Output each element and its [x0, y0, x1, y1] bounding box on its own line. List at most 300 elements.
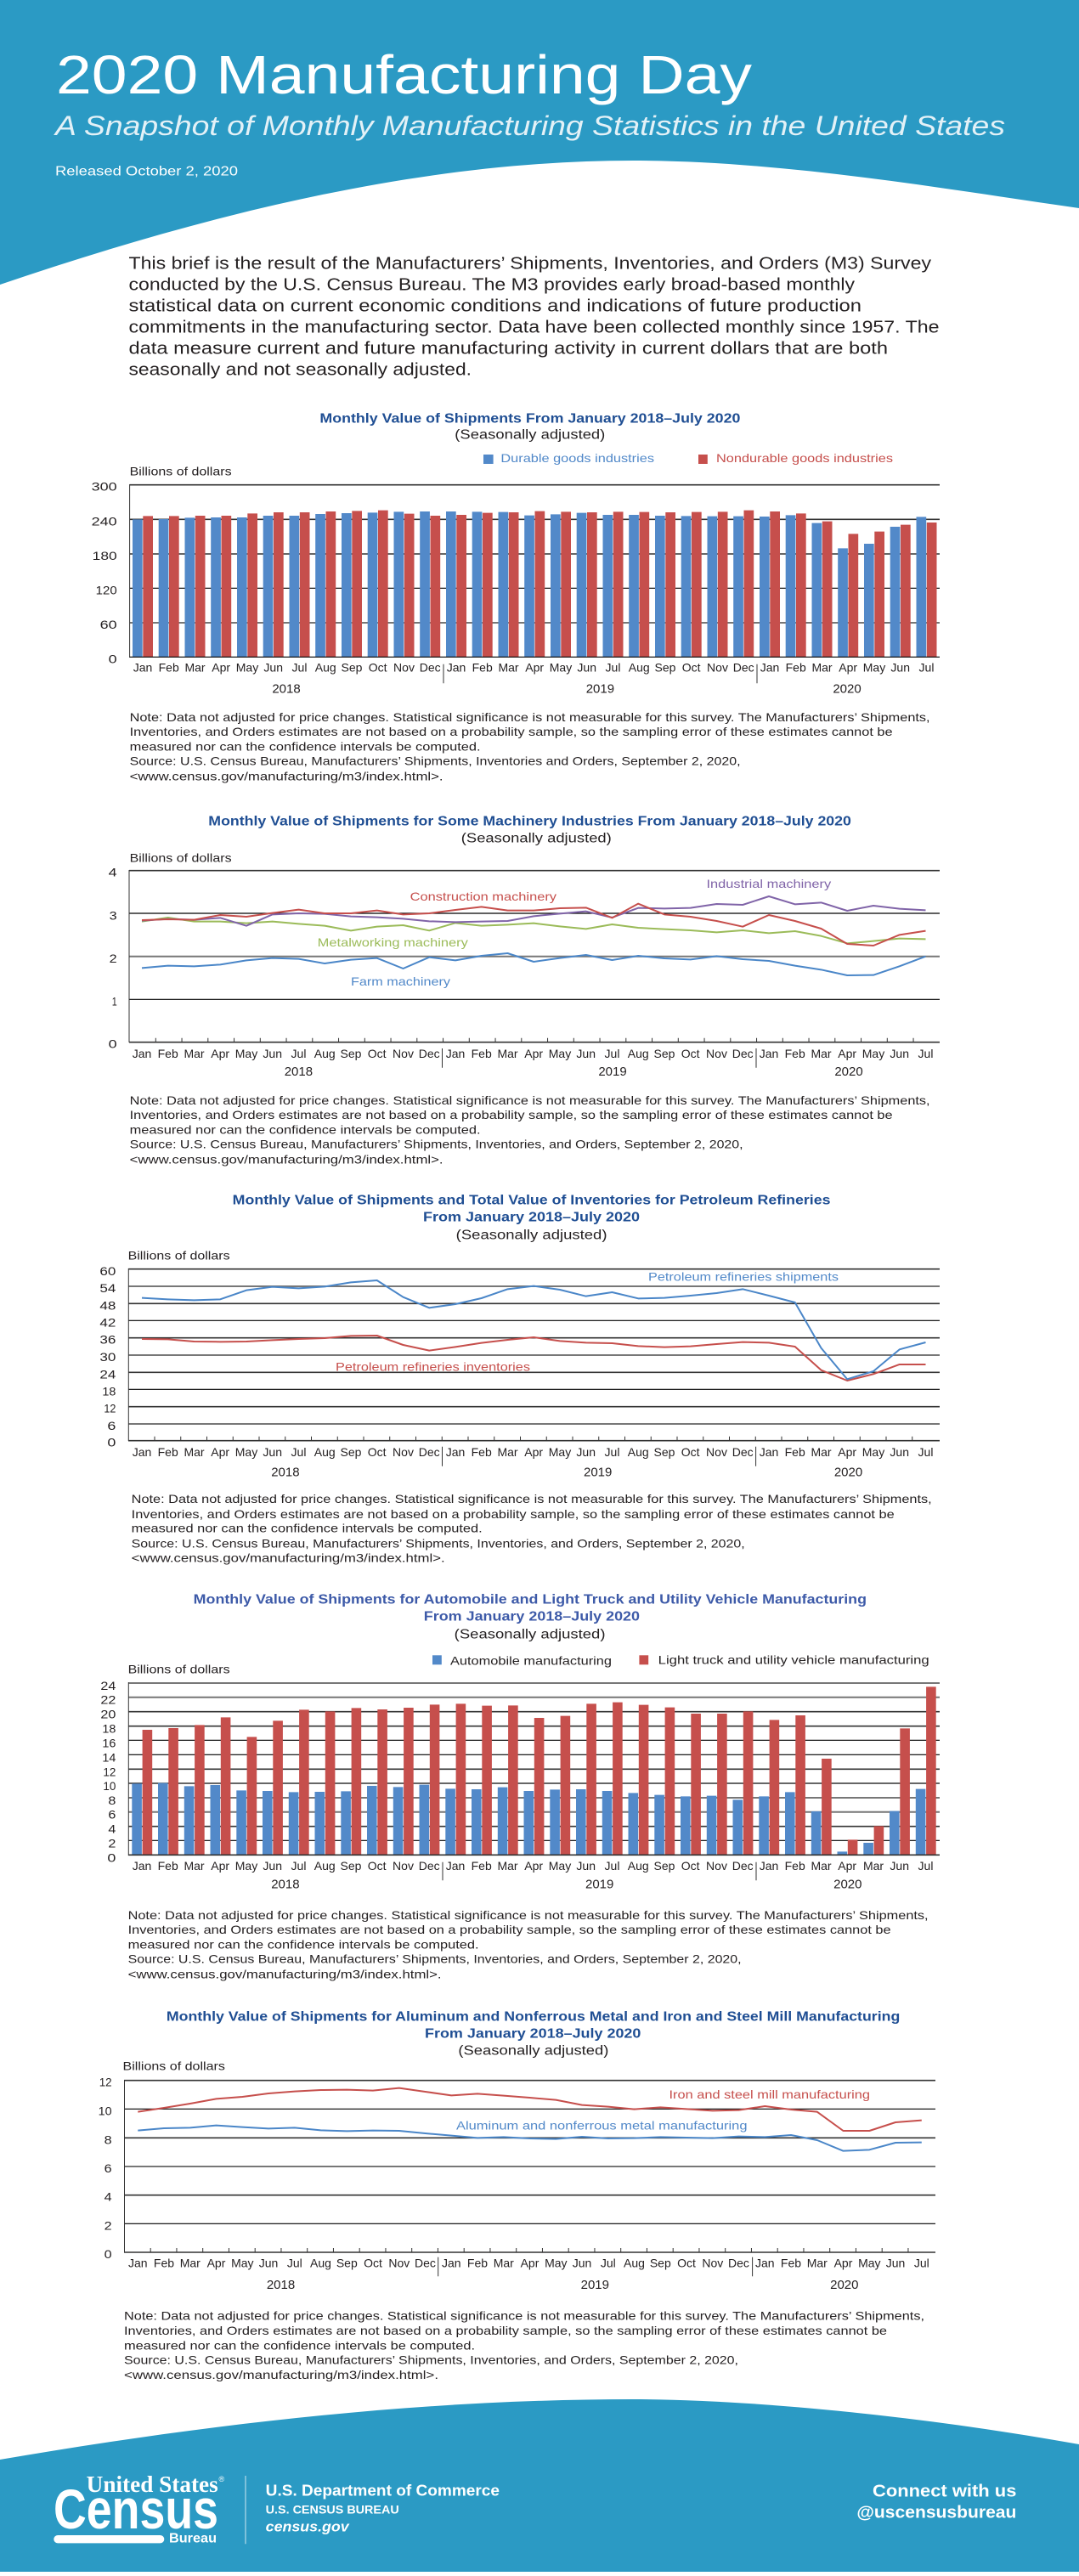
axis unit label: Billions of dollars — [128, 1249, 230, 1263]
month labels: Aug — [314, 1047, 336, 1060]
line: petroleum refineries inventories — [142, 1336, 926, 1381]
subtitle: A Snapshot of Monthly Manufacturing Statistics in the United States — [54, 110, 1005, 141]
month labels: Mar — [180, 2257, 201, 2270]
month labels: Feb — [472, 1047, 492, 1060]
header banner — [0, 0, 1079, 285]
y axis labels: 4 — [105, 2190, 112, 2204]
y axis labels — [99, 2076, 112, 2261]
month labels: Jan — [128, 2257, 148, 2270]
month labels: Apr — [211, 1859, 229, 1873]
census bureau logo: United States — [87, 2471, 218, 2497]
axis unit label: Billions of dollars — [130, 464, 232, 477]
month labels: May — [545, 2257, 568, 2270]
month labels: May — [863, 661, 885, 675]
month labels: Jun — [890, 1445, 909, 1459]
month labels: Feb — [781, 2257, 801, 2270]
chart title — [194, 1593, 867, 1624]
year labels: 2019 — [581, 2278, 609, 2292]
year labels: 2019 — [586, 682, 614, 697]
month labels: Aug — [628, 1445, 649, 1459]
year labels: 2018 — [285, 1065, 313, 1079]
month labels: Apr — [521, 2257, 540, 2270]
chart subtitle: (Seasonally adjusted) — [461, 832, 612, 846]
intro text block: data measure current and future manufacturing activity in current dollars that are both — [129, 340, 888, 359]
intro text block: conducted by the U.S. Census Bureau. The M3 provides early broad-based monthly — [129, 276, 855, 295]
y axis labels: 48 — [99, 1298, 116, 1312]
month labels: Nov — [706, 1445, 727, 1459]
month labels: Jul — [918, 1859, 933, 1873]
note and source: measured nor can the confidence intervals be computed. — [130, 1123, 481, 1137]
year labels: 2019 — [584, 1466, 612, 1480]
month labels: May — [235, 1445, 257, 1459]
month labels: Jun — [576, 1859, 596, 1873]
month labels: Jan — [760, 1047, 778, 1060]
month labels: Oct — [364, 2257, 382, 2270]
y axis labels: 16 — [102, 1737, 116, 1750]
chart title: From January 2018–July 2020 — [424, 1610, 640, 1624]
month labels: Sep — [341, 1445, 362, 1459]
social call to action: @uscensusbureau — [856, 2503, 1016, 2522]
chart title: Monthly Value of Shipments for Automobile and Light Truck and Utility Vehicle Manufacturing — [194, 1593, 867, 1607]
y axis labels: 6 — [105, 2161, 112, 2175]
month labels: Aug — [628, 1859, 649, 1873]
note and source: <www.census.gov/manufacturing/m3/index.html>. — [130, 770, 443, 783]
note and source: Inventories, and Orders estimates are not based on a probability sample, so the sampling error of these estimates cannot be — [128, 1923, 891, 1936]
y axis labels: 3 — [110, 909, 117, 923]
month labels: Apr — [838, 1859, 856, 1873]
y axis labels: 10 — [103, 1779, 116, 1793]
month labels: Nov — [706, 1047, 727, 1060]
department text — [266, 2483, 500, 2534]
month labels: Feb — [785, 1859, 805, 1873]
y axis labels — [99, 1264, 116, 1449]
month labels: Jan — [760, 661, 779, 675]
y axis labels: 240 — [92, 514, 117, 528]
note and source — [130, 710, 930, 783]
y axis labels: 4 — [108, 1822, 116, 1836]
y axis labels: 12 — [104, 1402, 116, 1415]
month labels: Aug — [628, 1047, 649, 1060]
month labels: Jun — [890, 1859, 909, 1873]
year labels: 2018 — [267, 2278, 295, 2292]
month labels: Apr — [834, 2257, 853, 2270]
month labels: May — [231, 2257, 254, 2270]
legend: Nondurable goods industries — [716, 451, 893, 465]
month labels: Jul — [291, 1859, 306, 1873]
month labels: Aug — [624, 2257, 645, 2270]
month labels: Feb — [472, 1445, 492, 1459]
axis unit label: Billions of dollars — [130, 850, 232, 864]
y axis labels — [92, 480, 117, 665]
month labels: Jan — [133, 1859, 151, 1873]
department text: U.S. CENSUS BUREAU — [266, 2503, 399, 2517]
y axis labels: 6 — [108, 1808, 116, 1822]
social call to action — [856, 2482, 1016, 2522]
year labels: 2020 — [833, 1878, 862, 1892]
title: 2020 Manufacturing Day — [56, 44, 752, 105]
month labels: Sep — [341, 1047, 362, 1060]
y axis labels: 0 — [107, 1850, 116, 1864]
month labels: Mar — [184, 1047, 205, 1060]
chart subtitle: (Seasonally adjusted) — [455, 1627, 605, 1641]
y axis labels — [109, 866, 117, 1050]
y axis labels: 0 — [109, 1037, 117, 1050]
line: industrial machinery — [142, 896, 926, 926]
month labels: Jun — [573, 2257, 591, 2270]
note and source: <www.census.gov/manufacturing/m3/index.html>. — [132, 1551, 445, 1565]
month labels: Jun — [263, 1445, 282, 1459]
month labels: Nov — [393, 661, 415, 675]
department text: census.gov — [266, 2518, 350, 2534]
month labels: Jun — [576, 1445, 596, 1459]
y axis labels: 60 — [100, 618, 117, 631]
month labels: Nov — [388, 2257, 410, 2270]
month labels: Jul — [292, 661, 307, 675]
month labels: Oct — [682, 661, 701, 675]
month labels: Dec — [415, 2257, 436, 2270]
note and source: Source: U.S. Census Bureau, Manufacturers’ Shipments, Inventories, and Orders, September 2, 2020, — [128, 1952, 742, 1966]
y axis labels: 2 — [108, 1836, 116, 1850]
month labels: Mar — [811, 1859, 832, 1873]
note and source: measured nor can the confidence intervals be computed. — [128, 1938, 479, 1952]
month labels: Jun — [263, 1047, 282, 1060]
month labels: Jul — [918, 1445, 933, 1459]
month labels: Jan — [755, 2257, 775, 2270]
line: iron and steel mill manufacturing — [138, 2088, 922, 2131]
axis unit label: Billions of dollars — [122, 2059, 225, 2073]
month labels: Jul — [605, 1859, 619, 1873]
line label: iron and steel: Iron and steel mill manufacturing — [669, 2087, 870, 2101]
line: farm machinery — [142, 953, 926, 975]
line label: metalworking machinery: Metalworking machinery — [318, 935, 468, 949]
intro text block: statistical data on current economic conditions and indications of future production — [129, 297, 862, 316]
year labels: 2020 — [830, 2278, 858, 2292]
month labels: Mar — [184, 1859, 205, 1873]
y axis labels: 300 — [92, 480, 117, 494]
month labels: Oct — [681, 1047, 700, 1060]
panel: petroleum refineries line chart — [99, 1194, 940, 1565]
note and source: measured nor can the confidence intervals be computed. — [124, 2338, 475, 2352]
month labels: Jul — [291, 1445, 306, 1459]
legend: Durable goods industries — [500, 451, 654, 465]
month labels: Jun — [890, 1047, 909, 1060]
month labels: Aug — [629, 661, 650, 675]
month labels: Sep — [342, 661, 363, 675]
month labels: Oct — [681, 1445, 700, 1459]
y axis labels: 2 — [110, 952, 117, 965]
panel: aluminum and steel line chart — [99, 2010, 935, 2381]
note and source: Note: Data not adjusted for price changes. Statistical significance is not measurable for this survey. The Manufacturers’ Shipments, — [132, 1492, 932, 1505]
line: construction machinery — [142, 904, 926, 946]
release date: Released October 2, 2020 — [55, 165, 238, 179]
month labels: Jul — [918, 1047, 933, 1060]
month labels: Mar — [863, 1859, 884, 1873]
chart title — [233, 1194, 831, 1225]
year labels: 2018 — [272, 682, 301, 697]
month labels: Mar — [184, 661, 206, 675]
y axis labels: 24 — [100, 1679, 116, 1692]
note and source — [132, 1492, 932, 1565]
chart title — [167, 2010, 900, 2042]
month labels: Jan — [760, 1445, 778, 1459]
y axis labels: 180 — [93, 549, 117, 562]
month labels: Jan — [446, 1047, 465, 1060]
note and source — [128, 1908, 929, 1981]
line label: industrial machinery: Industrial machinery — [707, 877, 831, 890]
month labels: Apr — [211, 1047, 229, 1060]
month labels: Feb — [158, 1445, 178, 1459]
month labels: Mar — [807, 2257, 828, 2270]
year labels: 2018 — [271, 1878, 300, 1892]
chart subtitle: (Seasonally adjusted) — [455, 428, 605, 443]
month labels: Jan — [760, 1859, 778, 1873]
month labels: Jul — [291, 1047, 306, 1060]
month labels: Nov — [393, 1445, 414, 1459]
year labels: 2020 — [833, 682, 862, 697]
month labels: Dec — [420, 661, 441, 675]
y axis labels: 120 — [96, 583, 117, 596]
line label: farm machinery: Farm machinery — [351, 974, 450, 988]
note and source: Source: U.S. Census Bureau, Manufacturers’ Shipments, Inventories, and Orders, September 2, 2020, — [130, 1138, 743, 1151]
bars: nondurable goods — [143, 511, 937, 657]
line: aluminum and nonferrous metal manufacturing — [138, 2126, 922, 2151]
month labels: Feb — [472, 661, 493, 675]
chart subtitle: (Seasonally adjusted) — [458, 2044, 608, 2059]
month labels: Sep — [336, 2257, 358, 2270]
month labels: Apr — [838, 1445, 856, 1459]
line: petroleum refineries shipments — [142, 1280, 926, 1379]
bars: durable goods — [133, 511, 926, 657]
y axis labels: 0 — [107, 1436, 116, 1449]
line label: shipments: Petroleum refineries shipments — [648, 1270, 839, 1284]
chart subtitle: (Seasonally adjusted) — [456, 1228, 607, 1242]
month labels: Apr — [524, 1047, 543, 1060]
month labels: Dec — [732, 1047, 754, 1060]
month labels: Dec — [419, 1445, 440, 1459]
month labels: May — [858, 2257, 881, 2270]
y axis labels: 60 — [99, 1264, 116, 1278]
month labels: Mar — [184, 1445, 205, 1459]
social call to action: Connect with us — [873, 2482, 1016, 2500]
note and source: measured nor can the confidence intervals be computed. — [130, 740, 481, 754]
month labels: Feb — [786, 661, 806, 675]
chart title: Monthly Value of Shipments and Total Value of Inventories for Petroleum Refineries — [233, 1194, 831, 1208]
month labels: Jul — [914, 2257, 929, 2270]
y axis labels: 0 — [109, 652, 117, 665]
month labels: Apr — [524, 1859, 543, 1873]
note and source: Note: Data not adjusted for price changes. Statistical significance is not measurable for this survey. The Manufacturers’ Shipments, — [130, 1093, 930, 1107]
note and source: Note: Data not adjusted for price changes. Statistical significance is not measurable for this survey. The Manufacturers’ Shipments, — [124, 2309, 924, 2323]
month labels: Jun — [577, 661, 596, 675]
month labels: May — [236, 661, 258, 675]
month labels: Jan — [133, 661, 152, 675]
note and source: measured nor can the confidence intervals be computed. — [132, 1522, 483, 1535]
month labels: Mar — [497, 1859, 518, 1873]
month labels: Jul — [606, 661, 620, 675]
y axis labels: 14 — [102, 1750, 116, 1764]
year labels: 2020 — [834, 1065, 863, 1079]
month labels: Aug — [315, 661, 336, 675]
month labels: Jun — [886, 2257, 905, 2270]
y axis labels: 20 — [100, 1708, 116, 1721]
year labels: 2019 — [598, 1065, 627, 1079]
month labels: May — [550, 661, 572, 675]
month labels: Nov — [393, 1047, 414, 1060]
month labels: Aug — [314, 1859, 336, 1873]
month labels: Jun — [263, 661, 283, 675]
month labels: Jan — [447, 661, 466, 675]
chart title: Monthly Value of Shipments for Some Machinery Industries From January 2018–July 2020 — [208, 815, 851, 829]
month labels: May — [235, 1859, 257, 1873]
legend — [432, 1653, 929, 1667]
month labels: Mar — [497, 1047, 518, 1060]
month labels: Apr — [838, 1047, 856, 1060]
note and source: Source: U.S. Census Bureau, Manufacturers’ Shipments, Inventories, and Orders, September 2, 2020, — [132, 1537, 745, 1551]
month labels: Dec — [732, 1859, 754, 1873]
month labels: Mar — [498, 661, 519, 675]
month labels: Sep — [650, 2257, 671, 2270]
month labels: Sep — [655, 661, 676, 675]
month labels: Feb — [467, 2257, 488, 2270]
note and source: <www.census.gov/manufacturing/m3/index.html>. — [128, 1968, 442, 1981]
month labels: Jul — [605, 1047, 619, 1060]
month labels: Mar — [497, 1445, 518, 1459]
month labels: Feb — [785, 1047, 805, 1060]
chart title: Monthly Value of Shipments for Aluminum and Nonferrous Metal and Iron and Steel Mill Manufacturing — [167, 2010, 900, 2025]
panel: total shipments bar chart — [92, 411, 940, 783]
census bureau logo: Bureau — [169, 2532, 217, 2546]
month labels: Apr — [212, 661, 230, 675]
y axis labels: 12 — [103, 1765, 116, 1778]
month labels: Jul — [287, 2257, 302, 2270]
month labels: Jan — [133, 1047, 151, 1060]
month labels: Aug — [310, 2257, 331, 2270]
y axis labels: 8 — [105, 2133, 112, 2146]
year labels: 2018 — [271, 1466, 300, 1480]
month labels: Jul — [601, 2257, 616, 2270]
month labels: May — [549, 1859, 571, 1873]
y axis labels: 30 — [99, 1350, 116, 1364]
month labels: Oct — [677, 2257, 696, 2270]
note and source: Note: Data not adjusted for price changes. Statistical significance is not measurable for this survey. The Manufacturers’ Shipments, — [128, 1908, 929, 1922]
month labels: May — [549, 1445, 571, 1459]
intro text block: seasonally and not seasonally adjusted. — [129, 361, 472, 380]
footer banner — [0, 2399, 1079, 2572]
month labels: May — [862, 1047, 884, 1060]
month labels: Aug — [314, 1445, 336, 1459]
y axis labels: 12 — [99, 2076, 112, 2089]
panel: automobile and light truck bar chart — [100, 1593, 940, 1981]
bars: automobile manufacturing — [132, 1783, 925, 1855]
y axis labels: 24 — [99, 1367, 116, 1381]
note and source: Inventories, and Orders estimates are not based on a probability sample, so the sampling error of these estimates cannot be — [124, 2324, 887, 2337]
y axis labels: 18 — [102, 1384, 116, 1398]
note and source: Source: U.S. Census Bureau, Manufacturers’ Shipments, Inventories, and Orders, September 2, 2020, — [124, 2353, 738, 2367]
month labels: Jun — [263, 1859, 282, 1873]
panel: machinery line chart — [109, 815, 940, 1167]
intro text block — [129, 255, 940, 380]
month labels: Jul — [605, 1445, 619, 1459]
chart title: Monthly Value of Shipments From January 2018–July 2020 — [319, 411, 741, 426]
month labels: Feb — [159, 661, 179, 675]
y axis labels: 4 — [109, 866, 117, 879]
month labels: Jan — [133, 1445, 151, 1459]
month labels: Jan — [446, 1859, 465, 1873]
month labels: Apr — [524, 1445, 543, 1459]
census bureau logo: Census — [54, 2477, 218, 2540]
note and source: <www.census.gov/manufacturing/m3/index.html>. — [124, 2368, 438, 2381]
month labels: Jan — [442, 2257, 461, 2270]
axis unit label: Billions of dollars — [128, 1662, 230, 1675]
note and source: Inventories, and Orders estimates are not based on a probability sample, so the sampling error of these estimates cannot be — [130, 1108, 893, 1121]
note and source — [130, 1093, 930, 1167]
month labels: Jun — [259, 2257, 278, 2270]
month labels: Jun — [576, 1047, 596, 1060]
month labels: Jul — [919, 661, 934, 675]
month labels: Sep — [654, 1047, 675, 1060]
note and source: Source: U.S. Census Bureau, Manufacturers’ Shipments, Inventories and Orders, September 2, 2020, — [130, 754, 741, 768]
year labels: 2020 — [834, 1466, 862, 1480]
month labels: Apr — [839, 661, 857, 675]
month labels: Dec — [419, 1047, 440, 1060]
month labels: Nov — [706, 1859, 727, 1873]
month labels: Feb — [472, 1859, 492, 1873]
census bureau logo: ® — [219, 2475, 224, 2483]
y axis labels: 10 — [99, 2104, 112, 2117]
department text: U.S. Department of Commerce — [266, 2483, 500, 2500]
y axis labels: 54 — [99, 1281, 116, 1295]
note and source: Inventories, and Orders estimates are not based on a probability sample, so the sampling error of these estimates cannot be — [132, 1507, 895, 1521]
y axis labels: 6 — [107, 1419, 116, 1432]
line label: construction machinery: Construction machinery — [410, 890, 556, 903]
bars: light truck and utility vehicle manufacturing — [143, 1686, 936, 1855]
legend: Automobile manufacturing — [450, 1653, 612, 1667]
line: metalworking machinery — [142, 918, 926, 943]
month labels: Sep — [654, 1859, 675, 1873]
month labels: Mar — [811, 661, 833, 675]
legend — [483, 451, 893, 465]
y axis labels: 2 — [105, 2218, 112, 2232]
year labels: 2019 — [585, 1878, 613, 1892]
month labels: Mar — [811, 1445, 832, 1459]
month labels: Nov — [393, 1859, 414, 1873]
month labels: Dec — [733, 661, 754, 675]
line label: inventories: Petroleum refineries inventories — [336, 1359, 530, 1373]
month labels: Oct — [369, 661, 387, 675]
month labels: May — [235, 1047, 257, 1060]
y axis labels: 22 — [100, 1693, 116, 1707]
y axis labels — [100, 1679, 116, 1864]
line label: aluminum: Aluminum and nonferrous metal manufacturing — [456, 2119, 748, 2133]
y axis labels: 36 — [99, 1333, 116, 1347]
month labels: Feb — [158, 1047, 178, 1060]
month labels: Nov — [707, 661, 728, 675]
y axis labels: 0 — [105, 2247, 112, 2261]
month labels: Apr — [211, 1445, 229, 1459]
month labels: Dec — [732, 1445, 754, 1459]
month labels: Sep — [654, 1445, 675, 1459]
month labels: Feb — [785, 1445, 805, 1459]
month labels: Apr — [207, 2257, 226, 2270]
month labels: May — [549, 1047, 571, 1060]
month labels: Feb — [154, 2257, 174, 2270]
month labels: Sep — [341, 1859, 362, 1873]
month labels: Jun — [890, 661, 910, 675]
month labels: Nov — [702, 2257, 723, 2270]
chart title: From January 2018–July 2020 — [423, 1211, 640, 1225]
month labels: Oct — [368, 1859, 387, 1873]
legend: Light truck and utility vehicle manufacturing — [658, 1653, 929, 1667]
